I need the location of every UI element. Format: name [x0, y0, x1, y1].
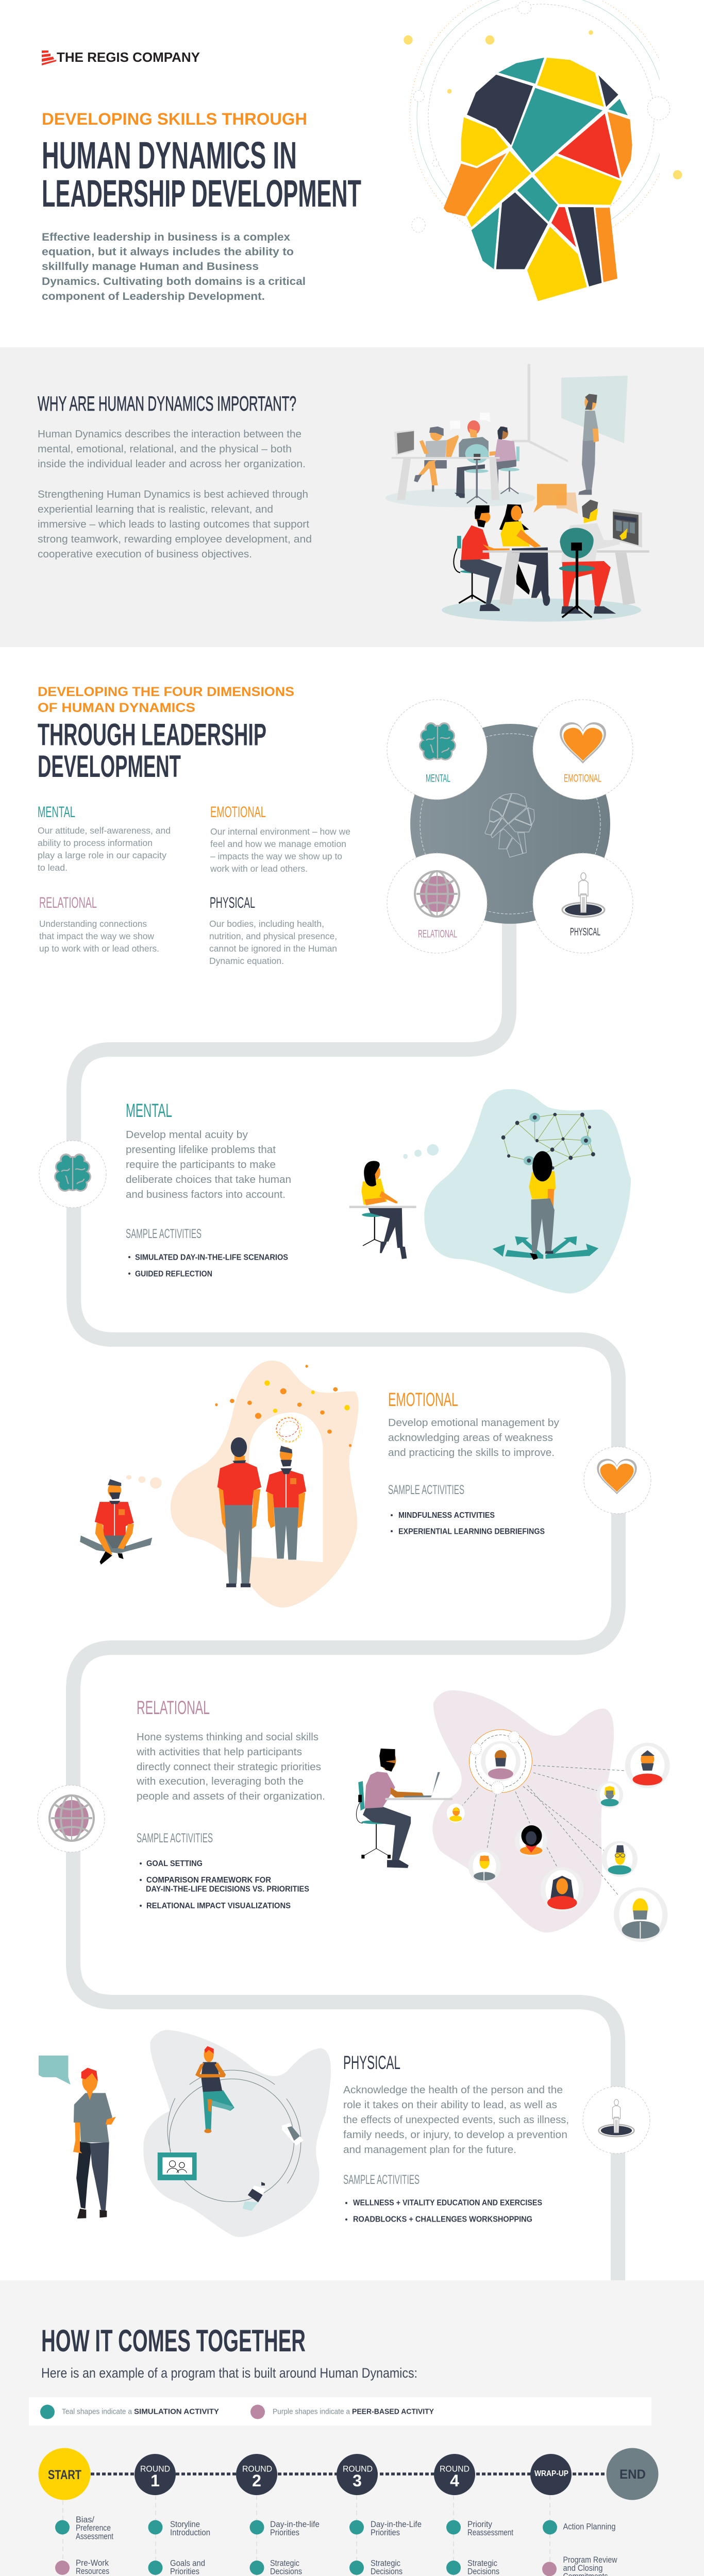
- man from behind: [217, 1437, 261, 1587]
- panel: how it comes together: [0, 2280, 704, 2576]
- icon: bandage: [282, 2123, 304, 2146]
- orbit nodes and dots: [404, 1, 682, 232]
- hero heading: [42, 110, 361, 215]
- legend: purple peer based: [250, 2405, 434, 2419]
- round 2 node: [236, 2454, 277, 2495]
- text block: emotional: SAMPLE ACTIVITIES: [388, 1483, 464, 1497]
- text block: human dynamics definition: Strengthening Human Dynamics is best achieved through: [38, 489, 308, 500]
- text block: relational: SAMPLE ACTIVITIES: [137, 1831, 213, 1845]
- round 1 activities: Priorities: [170, 2567, 199, 2576]
- round 3 activities: Strategic: [371, 2558, 400, 2568]
- heading: why important: WHY ARE HUMAN DYNAMICS IMPORTANT?: [38, 393, 296, 415]
- text block: human dynamics definition: Human Dynamics describes the interaction between the: [38, 429, 301, 440]
- text block: mental: deliberate choices that take human: [126, 1174, 291, 1185]
- round 3 activities: Day-in-the-Life: [371, 2519, 422, 2529]
- start activities: Preference: [76, 2523, 111, 2533]
- section heading: four dimensions: THROUGH LEADERSHIP: [38, 717, 266, 752]
- swirl above reflection: [274, 1417, 301, 1443]
- round 1 activities: Storyline: [170, 2519, 200, 2529]
- text block: emotional: Develop emotional management by: [388, 1417, 559, 1429]
- text block: emotional: EXPERIENTIAL LEARNING DEBRIEFINGS: [398, 1527, 545, 1536]
- man at laptop: [356, 1749, 452, 1868]
- head mosaic: [444, 58, 632, 301]
- round 1 activities: [148, 2519, 224, 2576]
- icon: physical badge on path: [583, 2087, 650, 2154]
- text block: physical: the effects of unexpected events, such as illness,: [343, 2114, 569, 2126]
- back table group: [385, 413, 535, 507]
- round 3 node: 3: [353, 2471, 362, 2490]
- blob background: [432, 1690, 614, 1933]
- front table group: [442, 500, 649, 622]
- kicker: DEVELOPING SKILLS THROUGH: [42, 110, 307, 128]
- icon: photo stamp: [158, 2153, 197, 2180]
- hero orbit rings: [409, 0, 660, 229]
- wrap-up node: WRAP-UP: [534, 2469, 568, 2478]
- round 3 node: ROUND: [343, 2464, 373, 2474]
- start node: START: [48, 2468, 81, 2482]
- wrap-up activities: [542, 2520, 617, 2576]
- standing woman: [529, 1151, 556, 1260]
- text block: relational: RELATIONAL IMPACT VISUALIZATIONS: [146, 1902, 291, 1910]
- timeline vertical dashed connectors: [63, 2495, 550, 2576]
- text block: physical: SAMPLE ACTIVITIES: [343, 2173, 420, 2187]
- text block: physical: WELLNESS + VITALITY EDUCATION AND EXERCISES: [353, 2199, 542, 2207]
- legend: [29, 2397, 651, 2426]
- text block: relational: DAY-IN-THE-LIFE DECISIONS VS. PRIORITIES: [146, 1885, 309, 1894]
- round 2 activities: Strategic: [270, 2558, 299, 2568]
- yoga figure: [195, 2046, 234, 2133]
- definition: relational: up to work with or lead others.: [39, 943, 159, 954]
- wireframe head: [485, 793, 534, 857]
- definition: mental: play a large role in our capacity: [38, 850, 166, 860]
- wrap-up activities: Program Review: [563, 2555, 617, 2565]
- round 3 activities: Priorities: [371, 2528, 400, 2537]
- definition: physical: [209, 894, 337, 966]
- illustration: mental reflection: [349, 1089, 631, 1294]
- mirror: [249, 1413, 323, 1562]
- decision arrows: [493, 1236, 598, 1259]
- definition: relational: that impact the way we show: [39, 931, 154, 941]
- back room wall and presenter: [512, 364, 628, 495]
- start activities: Bias/: [76, 2515, 94, 2524]
- hero intro paragraph: equation, but it always includes the ability to: [42, 246, 294, 258]
- hero intro paragraph: component of Leadership Development.: [42, 291, 265, 302]
- text block: emotional: EMOTIONAL: [388, 1389, 458, 1410]
- round 4 activities: Strategic: [467, 2558, 497, 2568]
- seated man: [80, 1479, 152, 1565]
- hero intro paragraph: Effective leadership in business is a complex: [42, 231, 290, 243]
- icon: relational badge on path: [38, 1785, 105, 1852]
- hero intro paragraph: [42, 231, 306, 302]
- definition: emotional: feel and how we manage emotion: [210, 839, 346, 849]
- heading: how it comes together: Here is an example of a program that is built around Human Dynamics:: [41, 2365, 417, 2381]
- legend: teal simulation: Teal shapes indicate a: [62, 2407, 132, 2416]
- section heading: four dimensions: DEVELOPMENT: [38, 749, 181, 784]
- illustration: physical wellness: [39, 2030, 331, 2237]
- text block: physical: Acknowledge the health of the person and the: [343, 2084, 563, 2096]
- title line two: LEADERSHIP DEVELOPMENT: [42, 172, 361, 215]
- heading: how it comes together: [41, 2324, 417, 2381]
- text block: physical: family needs, or injury, to develop a prevention: [343, 2129, 567, 2141]
- definition: emotional: – impacts the way we show up to: [210, 851, 342, 861]
- orbit rings: [167, 2070, 301, 2202]
- round 4 activities: Decisions: [467, 2567, 499, 2576]
- header logo: [42, 49, 200, 65]
- round 4 activities: Priority: [467, 2519, 492, 2529]
- node: emotional: [533, 700, 633, 800]
- start node: [38, 2448, 91, 2500]
- text block: relational: people and assets of their organization.: [137, 1791, 325, 1802]
- node: physical: [533, 853, 633, 953]
- text block: mental: Develop mental acuity by: [126, 1129, 248, 1141]
- text block: human dynamics definition: mental, emotional, relational, and the physical – both: [38, 444, 292, 455]
- round 3 activities: Decisions: [371, 2567, 403, 2576]
- node: mental: MENTAL: [426, 773, 450, 784]
- text block: physical: and management plan for the future.: [343, 2144, 516, 2156]
- definition: emotional: EMOTIONAL: [210, 804, 266, 821]
- definition: physical: Our bodies, including health,: [209, 919, 324, 929]
- network avatars: [447, 1742, 670, 1942]
- text block: mental: presenting lifelike problems that: [126, 1144, 276, 1156]
- logo mark: [42, 50, 56, 65]
- round 4 node: 4: [450, 2471, 459, 2490]
- text block: emotional: [388, 1389, 559, 1536]
- legend: teal simulation: [40, 2405, 219, 2419]
- definition: physical: PHYSICAL: [210, 894, 255, 911]
- title line one: HUMAN DYNAMICS IN: [42, 134, 297, 177]
- connector lines: [462, 1766, 624, 1896]
- section heading: four dimensions: OF HUMAN DYNAMICS: [38, 701, 195, 715]
- round 4 activities: [446, 2519, 515, 2576]
- central hub avatar: [469, 1730, 532, 1794]
- thought bubbles: [403, 1144, 439, 1159]
- reflection man: [266, 1446, 306, 1560]
- four dimensions hub diagram: [387, 700, 633, 953]
- round 2 node: 2: [252, 2471, 261, 2490]
- text block: human dynamics definition: experiential learning that is realistic, relevant, and: [38, 504, 273, 515]
- start activities: Assessment: [76, 2532, 113, 2541]
- text block: relational: with execution, leveraging both the: [136, 1776, 304, 1787]
- text block: human dynamics definition: immersive – which leads to lasting outcomes that support: [38, 519, 309, 530]
- definition: relational: [39, 894, 159, 954]
- text block: relational: RELATIONAL: [137, 1697, 210, 1718]
- text block: mental: SIMULATED DAY-IN-THE-LIFE SCENARIOS: [135, 1253, 288, 1262]
- text block: relational: GOAL SETTING: [146, 1859, 203, 1868]
- node: physical: PHYSICAL: [570, 926, 600, 938]
- definition: emotional: Our internal environment – how we: [210, 826, 350, 837]
- icon: water bottle: [242, 2182, 266, 2211]
- blob background: [424, 1089, 631, 1294]
- round 1 activities: Goals and: [170, 2558, 205, 2568]
- node: relational: RELATIONAL: [418, 928, 457, 940]
- section heading: four dimensions: [38, 685, 294, 784]
- definition: emotional: work with or lead others.: [210, 863, 308, 874]
- text block: physical: [343, 2052, 569, 2224]
- definition: mental: ability to process information: [38, 838, 153, 848]
- round 4 node: ROUND: [440, 2464, 470, 2474]
- program timeline: [38, 2448, 659, 2576]
- text block: relational: directly connect their strategic priorities: [137, 1761, 321, 1773]
- hero head graphic: [404, 1, 682, 301]
- round 3 node: [337, 2454, 378, 2495]
- text block: physical: ROADBLOCKS + CHALLENGES WORKSHOPPING: [353, 2215, 532, 2224]
- blob background: [171, 1361, 359, 1607]
- text block: mental: require the participants to make: [126, 1159, 276, 1171]
- text block: relational: COMPARISON FRAMEWORK FOR: [146, 1876, 271, 1885]
- text block: mental: GUIDED REFLECTION: [135, 1269, 212, 1279]
- definition: emotional: [210, 804, 350, 874]
- wrap-up activities: Action Planning: [563, 2521, 615, 2532]
- particles: [215, 1365, 351, 1447]
- round 1 node: ROUND: [140, 2464, 170, 2474]
- round 2 activities: Priorities: [270, 2528, 299, 2537]
- text block: relational: Hone systems thinking and social skills: [137, 1732, 319, 1743]
- hub dashed ring: [420, 734, 600, 914]
- text block: mental: SAMPLE ACTIVITIES: [126, 1227, 202, 1241]
- node: emotional: EMOTIONAL: [564, 773, 601, 784]
- round 2 activities: [249, 2519, 320, 2576]
- text block: emotional: MINDFULNESS ACTIVITIES: [398, 1511, 495, 1520]
- panel: why human dynamics matter: [0, 347, 704, 647]
- definition: relational: RELATIONAL: [39, 894, 97, 911]
- blob background: [143, 2030, 331, 2237]
- text block: relational: with activities that help participants: [136, 1747, 302, 1758]
- text block: relational: [136, 1697, 325, 1910]
- legend: purple peer based: Purple shapes indicate a: [273, 2407, 350, 2416]
- definition: mental: to lead.: [38, 862, 68, 873]
- text block: physical: role it takes on their ability to lead, as well as: [343, 2099, 557, 2111]
- definition: mental: MENTAL: [38, 804, 75, 821]
- round 1 activities: Introduction: [170, 2528, 210, 2537]
- round 2 activities: Day-in-the-life: [270, 2519, 320, 2529]
- text block: physical: PHYSICAL: [343, 2052, 400, 2073]
- text block: emotional: acknowledging areas of weakness: [388, 1432, 553, 1444]
- definition: physical: cannot be ignored in the Human: [209, 943, 337, 954]
- end node: END: [619, 2467, 646, 2482]
- wrap-up activities: and Closing: [563, 2563, 603, 2573]
- illustration: team working at desks: [385, 364, 649, 622]
- text block: mental: MENTAL: [126, 1100, 172, 1121]
- heading: how it comes together: HOW IT COMES TOGETHER: [41, 2324, 306, 2358]
- speech bubbles: [533, 484, 578, 514]
- seated woman: [349, 1161, 416, 1259]
- speaking woman: [39, 2056, 116, 2218]
- icon: mental badge on path: [39, 1141, 106, 1208]
- timeline dotted line: [91, 2472, 608, 2476]
- round 1 node: [135, 2454, 176, 2495]
- node: mental: [387, 700, 487, 800]
- text block: human dynamics definition: inside the individual leader and across her organization.: [38, 459, 306, 470]
- start activities: [55, 2515, 113, 2576]
- brain network: [504, 1114, 593, 1168]
- logo wordmark: THE REGIS COMPANY: [57, 49, 200, 65]
- icon: emotional badge on path: [584, 1447, 651, 1514]
- hub disc: [410, 724, 610, 924]
- round 1 node: 1: [150, 2471, 160, 2490]
- legend: teal simulation: SIMULATION ACTIVITY: [134, 2407, 219, 2416]
- round 2 node: ROUND: [242, 2464, 272, 2474]
- text block: human dynamics definition: cooperative execution of business objectives.: [38, 549, 252, 560]
- section heading: four dimensions: DEVELOPING THE FOUR DIMENSIONS: [38, 685, 294, 699]
- hero intro paragraph: skillfully manage Human and Business: [42, 261, 259, 273]
- definition: mental: Our attitude, self-awareness, and: [38, 825, 171, 836]
- network nodes: [501, 1113, 595, 1170]
- text block: human dynamics definition: strong teamwork, rewarding employee development, and: [38, 534, 312, 545]
- node: relational: [387, 853, 487, 953]
- definition: physical: Dynamic equation.: [209, 956, 284, 966]
- thought bubbles: [126, 1475, 162, 1488]
- definition: relational: Understanding connections: [39, 919, 147, 929]
- definition: physical: nutrition, and physical presence,: [209, 931, 337, 941]
- wrap-up node: [530, 2454, 572, 2495]
- round 2 activities: Decisions: [270, 2567, 302, 2576]
- definition: mental: [38, 804, 171, 873]
- legend: purple peer based: PEER-BASED ACTIVITY: [352, 2407, 434, 2416]
- round 3 activities: [348, 2519, 422, 2576]
- start activities: Resources: [76, 2566, 109, 2576]
- end node: [606, 2448, 659, 2500]
- hero intro paragraph: Dynamics. Cultivating both domains is a critical: [42, 276, 306, 287]
- text block: human dynamics definition: [38, 429, 312, 560]
- round 4 activities: Reassessment: [467, 2528, 513, 2537]
- text block: mental: and business factors into account.: [126, 1189, 286, 1200]
- illustration: relational network: [356, 1690, 670, 1942]
- start activities: Pre-Work: [76, 2558, 109, 2568]
- round 4 node: [434, 2454, 475, 2495]
- text block: emotional: and practicing the skills to improve.: [388, 1447, 555, 1459]
- road path connecting the dimensions: [73, 920, 618, 2280]
- text block: mental: [126, 1100, 291, 1279]
- illustration: emotional mirror: [80, 1361, 359, 1607]
